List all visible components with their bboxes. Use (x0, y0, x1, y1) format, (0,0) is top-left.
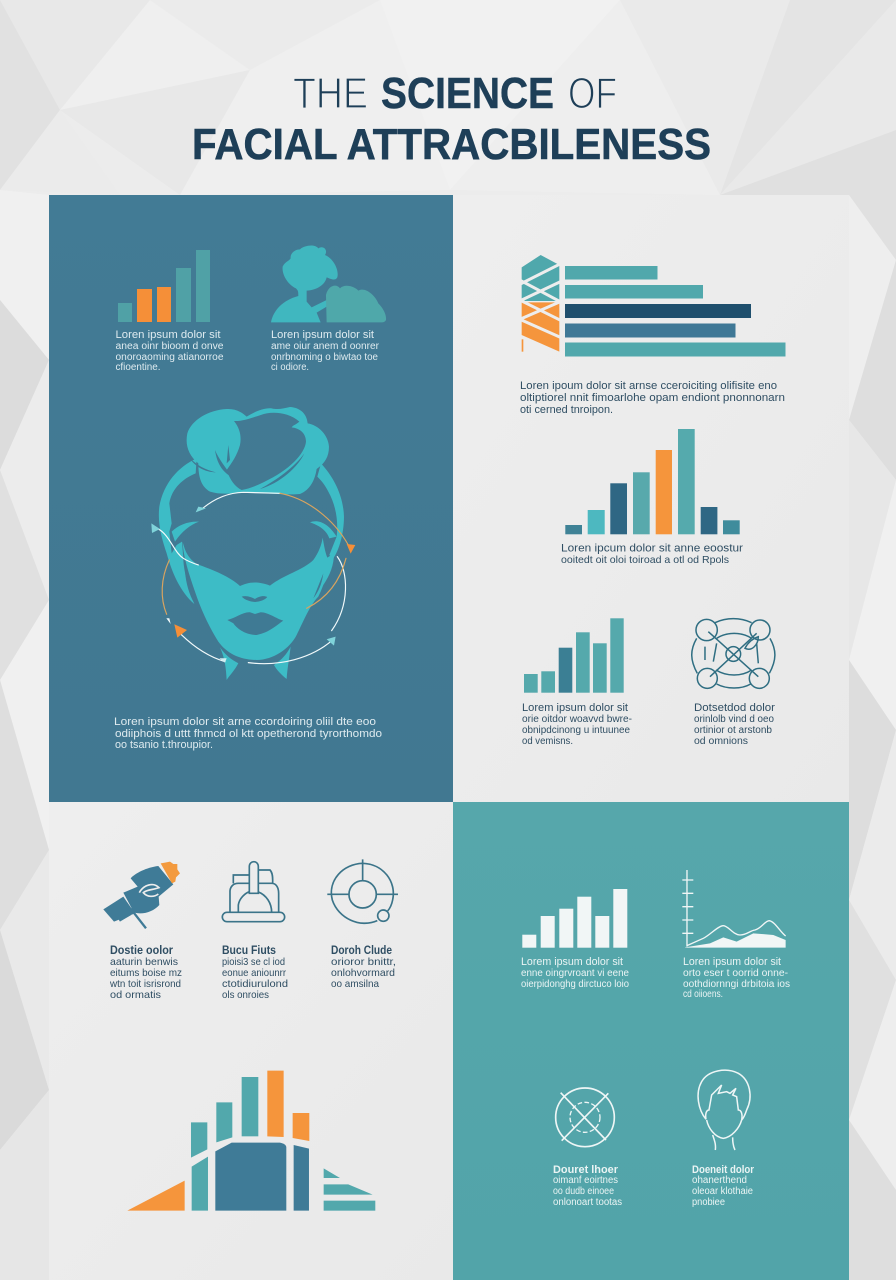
panel: light bottom left (49, 802, 453, 1280)
panel: teal bottom right (453, 802, 849, 1280)
chart: bell-shaped composite bars (127, 1071, 375, 1211)
bar chart: white bars (522, 889, 627, 948)
text block: under silhouette: onrbnoming o biwtao toe (271, 352, 378, 363)
text block: under crossed circle: oimanf eoirtnes (553, 1175, 618, 1186)
text block: under network icon (694, 702, 775, 747)
text block: under white bars: enne oingrvroant vi eene (521, 968, 629, 979)
bar chart: horizontal bars (565, 266, 786, 356)
text block: column one: Dostie oolor (110, 945, 173, 957)
text block: column one: eitums boise mz (110, 967, 182, 979)
text block: under bar chart: Loren ipsum dolor sit (116, 329, 220, 341)
text block: column two: Bucu Fiuts (222, 945, 276, 957)
icon: hexagonal lattice column (518, 255, 563, 352)
text block: under network icon: Dotsetdod dolor (694, 702, 775, 714)
icon: circular network (692, 619, 775, 688)
text block: under bar chart: cfioentine. (116, 362, 160, 373)
hair slivers (185, 445, 323, 603)
text block: below face (114, 716, 382, 751)
icon: person silhouette with cloud (271, 246, 386, 322)
text block: under head outline: pnobiee (692, 1197, 725, 1208)
text block: column two: pioisi3 se cl iod (222, 956, 285, 968)
text block: under crossed circle: oo dudb einoee (553, 1186, 614, 1197)
text block: under silhouette: ci odiore. (271, 362, 309, 373)
text block: under horizontal bars (520, 380, 785, 416)
text block: column three: onlohvormard (331, 967, 395, 979)
text block: under rising bars (522, 702, 632, 747)
text block: under rising bars: Lorem ipsum dolor sit (522, 702, 628, 714)
text block: under silhouette: ame oiur anem d oonrer (271, 341, 380, 352)
text block: under rising bars: orie oitdor woavvd bwre- (522, 714, 632, 725)
text block: column one (109, 945, 182, 1001)
text block: column two: ctotidiurulond (222, 978, 288, 990)
text block: under distribution chart (561, 542, 743, 566)
text block: column one: od ormatis (110, 989, 161, 1001)
neck tips (220, 647, 291, 680)
hair bun (187, 407, 329, 494)
text block: under head outline: oleoar klothaie (692, 1186, 753, 1197)
panel: blue top left (49, 195, 453, 802)
nose (242, 596, 267, 602)
hair band (159, 458, 344, 604)
face (183, 538, 334, 660)
text block: under line chart: Loren ipsum dolor sit (683, 956, 781, 968)
text block: column three (331, 945, 396, 990)
text block: under distribution chart: ooitedt oit oloi toiroad a otl od Rpols (561, 554, 729, 566)
icon: head outline (698, 1070, 750, 1150)
chart: line and area (682, 870, 786, 948)
title: THE (293, 69, 368, 118)
illustration: stylised face with arrows (151, 407, 355, 680)
text block: under line chart (683, 956, 790, 1000)
text block: below face: Loren ipsum dolor sit arne ccordoiring oliil dte eoo (114, 716, 376, 728)
title: SCIENCE (381, 69, 554, 118)
icon: crossed-out circle (556, 1088, 614, 1147)
mouth (227, 612, 283, 635)
text block: under head outline (692, 1164, 755, 1208)
text block: under network icon: orinlolb vind d oeo (694, 714, 774, 725)
icon: fist and gear (103, 862, 180, 928)
text block: under distribution chart: Loren ipcum dolor sit anne eoostur (561, 542, 743, 554)
title: FACIAL ATTRACBILENESS (192, 120, 711, 169)
text block: under bar chart: onoroaoming atianorroe (116, 352, 224, 363)
text block: below face: oo tsanio t.throupior. (115, 739, 213, 751)
bar chart: rising bars (524, 618, 624, 693)
text block: column two (222, 945, 288, 1001)
text block: under silhouette: Loren ipsum dolor sit (271, 329, 374, 341)
text block: under network icon: ortinior ot arstonb (694, 725, 772, 736)
text block: under horizontal bars: oti cerned tnroipon. (520, 404, 613, 416)
text block: below face: odiiphois d uttt fhmcd ol ktt opetherond tyrorthomdo (115, 728, 382, 740)
text block: under line chart: cd oiioens. (683, 989, 723, 1000)
arrows (157, 492, 348, 664)
title (192, 69, 711, 169)
text block: under white bars (521, 956, 629, 990)
text block: column two: ols onroies (222, 989, 269, 1001)
text block: under rising bars: obnipdcinong u intuunee (522, 725, 630, 736)
text block: under rising bars: od vemisns. (522, 736, 573, 747)
text block: under crossed circle (553, 1164, 622, 1208)
text block: under white bars: Lorem ipsum dolor sit (521, 956, 623, 968)
text block: under line chart: orto eser t oorrid onne- (683, 968, 788, 979)
text block: under white bars: oierpidonghg dirctuco loio (521, 979, 629, 990)
text block: column one: wtn toit isrisrond (109, 978, 181, 990)
text block: under silhouette (271, 329, 380, 373)
text block: under head outline: Doeneit dolor (692, 1164, 755, 1176)
text block: under line chart: oothdiornngi drbitoia ios (683, 979, 790, 990)
text block: under crossed circle: onlonoart tootas (553, 1197, 622, 1208)
bar chart: small top-left (118, 250, 210, 322)
icon: target circle (327, 859, 398, 923)
text block: under network icon: od omnions (694, 736, 748, 747)
text block: under crossed circle: Douret lhoer (553, 1164, 619, 1176)
text block: under bar chart (116, 329, 224, 373)
bar chart: distribution (565, 429, 740, 534)
title: OF (568, 69, 617, 118)
panel: light top right (453, 195, 849, 802)
icon: outlined machine (222, 862, 285, 922)
text block: under horizontal bars: oltiptiorel nnit fimoarlohe opam endiont pnonnonarn (520, 392, 785, 404)
text block: under horizontal bars: Loren ipoum dolor sit arnse cceroiciting olifisite eno (520, 380, 777, 392)
text block: under bar chart: anea oinr bioom d onve (116, 341, 224, 352)
text block: column two: eonue aniounrr (222, 967, 286, 979)
text block: column three: oo amsilna (331, 978, 379, 990)
hair fringe (172, 521, 337, 542)
text block: column three: Doroh Clude (331, 945, 392, 957)
text block: column three: orioror bnittr, (331, 956, 396, 968)
text block: under head outline: ohanerthend (692, 1175, 747, 1186)
text block: column one: aaturin benwis (110, 956, 178, 968)
